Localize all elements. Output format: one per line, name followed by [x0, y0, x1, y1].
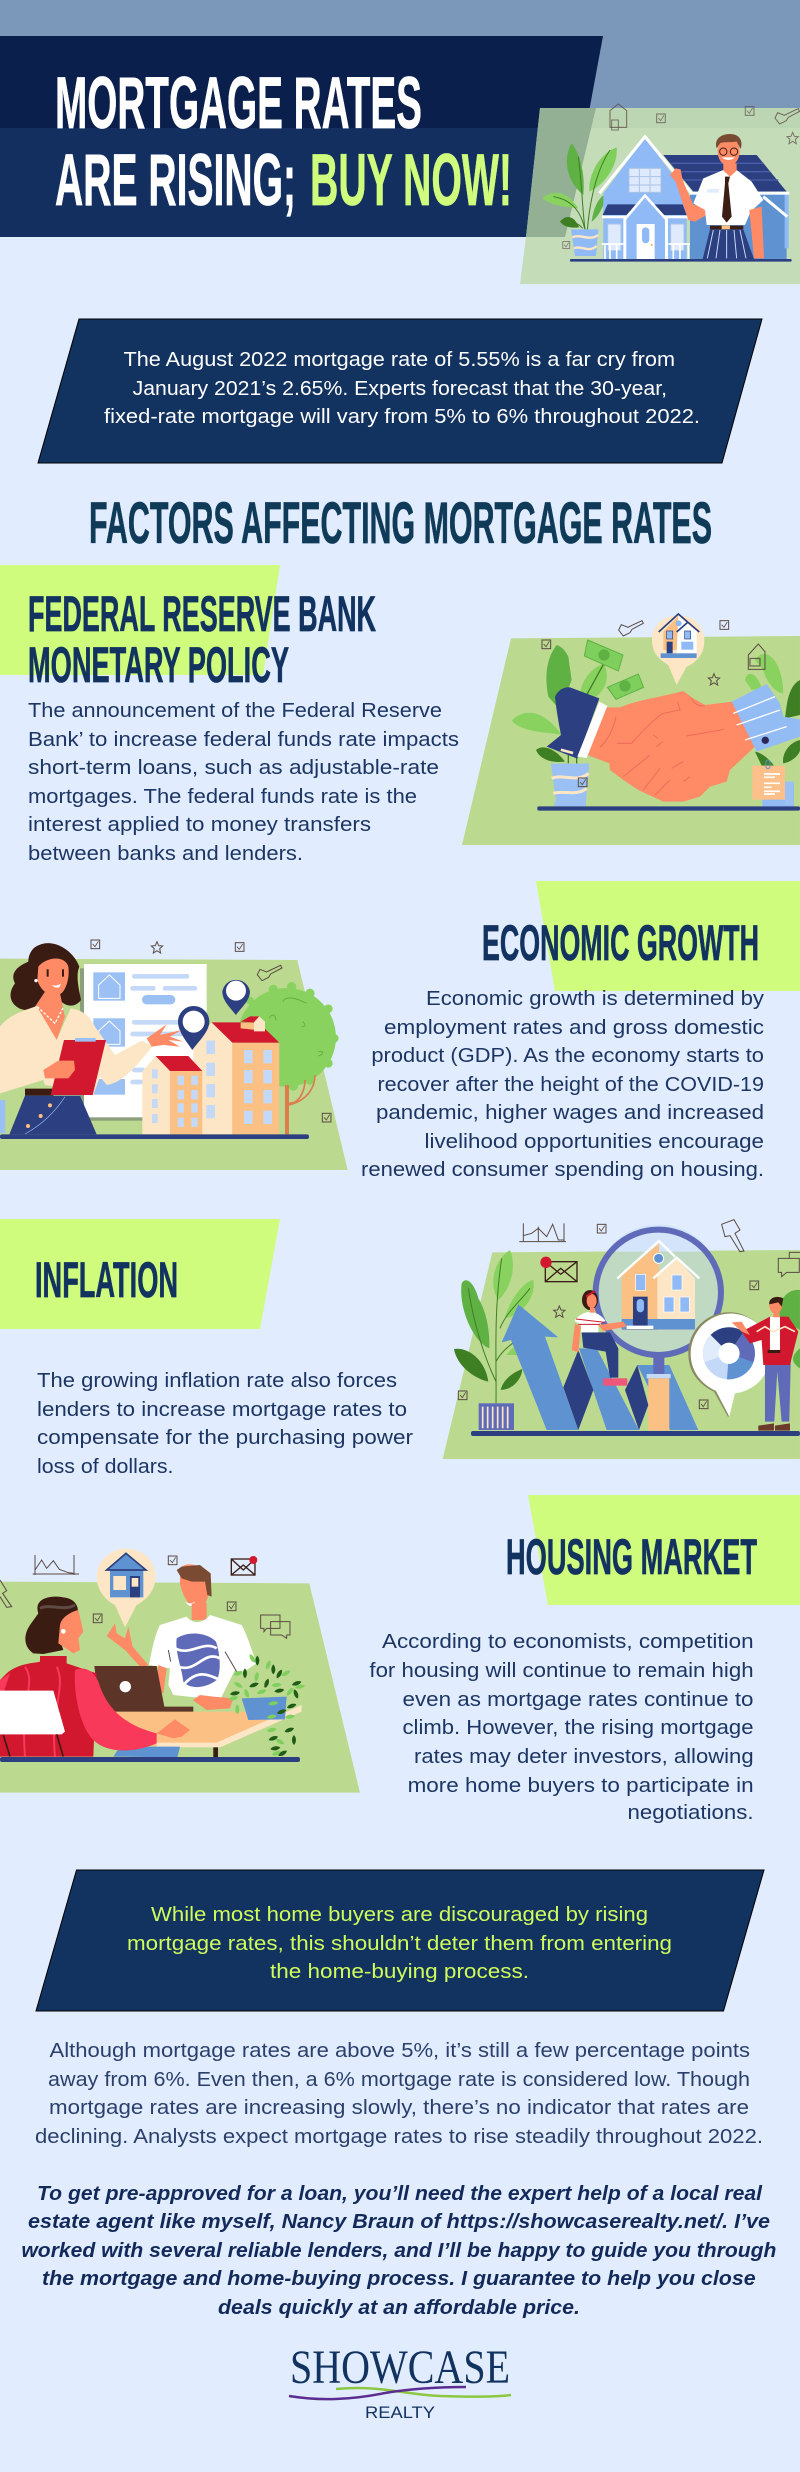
- heading block: federal reserve: FEDERAL RESERVE BANK: [28, 586, 376, 642]
- text: closing paragraph: Although mortgage rates are above 5%, it’s still a few percentage points: [50, 2040, 750, 2062]
- text: closing paragraph: mortgage rates are increasing slowly, there’s no indicator that rates are: [49, 2097, 749, 2119]
- text: housing market: more home buyers to participate in: [408, 1775, 754, 1797]
- logo: Showcase Realty: SHOWCASE: [290, 2341, 510, 2394]
- header: green illustration panel: [520, 108, 800, 284]
- heading block: economic growth: [482, 881, 800, 991]
- text: call to action: [21, 2183, 776, 2319]
- illustration: couple at table: [0, 1549, 360, 1793]
- text: closing paragraph: [35, 2040, 763, 2148]
- heading block: inflation: INFLATION: [35, 1252, 178, 1308]
- heading block: housing market: [506, 1495, 800, 1605]
- text: housing market: negotiations.: [628, 1802, 754, 1824]
- illustration: magnifying glass over house: [443, 1220, 800, 1459]
- text: economic growth: [361, 988, 764, 1181]
- text: call to action: To get pre-approved for a loan, you’ll need the expert help of a local real: [37, 2183, 762, 2205]
- text: housing market: for housing will continue to remain high: [369, 1660, 754, 1682]
- text: housing market: [369, 1631, 754, 1824]
- text: economic growth: recover after the height of the COVID-19: [378, 1074, 764, 1096]
- panel: economic growth: [0, 881, 800, 1181]
- text: inflation: compensate for the purchasing power: [37, 1427, 413, 1449]
- text: housing market: even as mortgage rates continue to: [402, 1689, 754, 1711]
- text: federal reserve: Bank’ to increase federal funds rate impacts: [28, 729, 459, 751]
- illustration: agent with buildings: [0, 940, 348, 1170]
- text: inflation: [37, 1370, 413, 1478]
- text: inflation: The growing inflation rate also forces: [37, 1370, 397, 1392]
- callout: intro statistic: January 2021’s 2.65%. Experts forecast that the 30-year,: [133, 378, 667, 400]
- heading block: inflation: [0, 1219, 280, 1329]
- callout: closing highlight: [36, 1870, 764, 2011]
- text: economic growth: pandemic, higher wages and increased: [376, 1102, 764, 1124]
- text: economic growth: livelihood opportunities encourage: [424, 1131, 764, 1153]
- text: federal reserve: interest applied to money transfers: [28, 814, 371, 836]
- title: MORTGAGE RATES: [55, 63, 422, 144]
- panel: inflation: [0, 1219, 800, 1478]
- heading block: federal reserve: [0, 565, 376, 693]
- text: inflation: lenders to increase mortgage rates to: [37, 1399, 407, 1421]
- panel: housing market: [0, 1495, 800, 1824]
- text: economic growth: renewed consumer spending on housing.: [361, 1159, 764, 1181]
- callout: closing highlight: While most home buyers are discouraged by rising: [151, 1904, 648, 1926]
- text: call to action: the mortgage and home-buying process. I guarantee to help you close: [42, 2268, 756, 2290]
- text: closing paragraph: declining. Analysts expect mortgage rates to rise steadily throughout 2022.: [35, 2126, 763, 2148]
- title: BUY NOW!: [310, 140, 512, 221]
- text: economic growth: Economic growth is determined by: [426, 988, 764, 1010]
- logo: Showcase Realty: [289, 2341, 511, 2422]
- text: economic growth: employment rates and gross domestic: [384, 1017, 764, 1039]
- text: federal reserve: between banks and lenders.: [28, 843, 303, 865]
- text: federal reserve: [28, 700, 459, 865]
- callout: intro statistic: fixed-rate mortgage will vary from 5% to 6% throughout 2022.: [104, 406, 700, 428]
- header: banner background: [0, 0, 800, 237]
- callout: closing highlight: the home-buying process.: [270, 1961, 529, 1983]
- callout: closing highlight: mortgage rates, this shouldn’t deter them from entering: [127, 1933, 672, 1955]
- heading block: federal reserve: MONETARY POLICY: [28, 637, 289, 693]
- logo: Showcase Realty: REALTY: [365, 2403, 435, 2422]
- callout: intro statistic: [38, 319, 762, 463]
- callout: intro statistic: The August 2022 mortgage rate of 5.55% is a far cry from: [124, 349, 675, 371]
- text: call to action: worked with several reliable lenders, and I’ll be happy to guide you through: [21, 2240, 776, 2262]
- text: inflation: loss of dollars.: [37, 1456, 174, 1478]
- text: housing market: According to economists, competition: [382, 1631, 754, 1653]
- illustration: handshake: [462, 614, 800, 845]
- text: call to action: deals quickly at an affordable price.: [218, 2297, 580, 2319]
- illustration: agent in front of house: [542, 104, 800, 262]
- text: housing market: rates may deter investors, allowing: [414, 1746, 754, 1768]
- text: economic growth: product (GDP). As the economy starts to: [371, 1045, 764, 1067]
- title: [55, 63, 512, 221]
- title: ARE RISING;: [55, 140, 296, 221]
- text: closing paragraph: away from 6%. Even then, a 6% mortgage rate is considered low. Though: [48, 2069, 750, 2091]
- text: federal reserve: mortgages. The federal funds rate is the: [28, 786, 417, 808]
- text: federal reserve: The announcement of the Federal Reserve: [28, 700, 442, 722]
- panel: federal reserve: [0, 565, 800, 865]
- text: housing market: climb. However, the rising mortgage: [402, 1717, 754, 1739]
- text: call to action: estate agent like myself, Nancy Braun of https://showcaserealty.net/. I’ve: [28, 2211, 770, 2233]
- text: federal reserve: short-term loans, such as adjustable-rate: [28, 757, 439, 779]
